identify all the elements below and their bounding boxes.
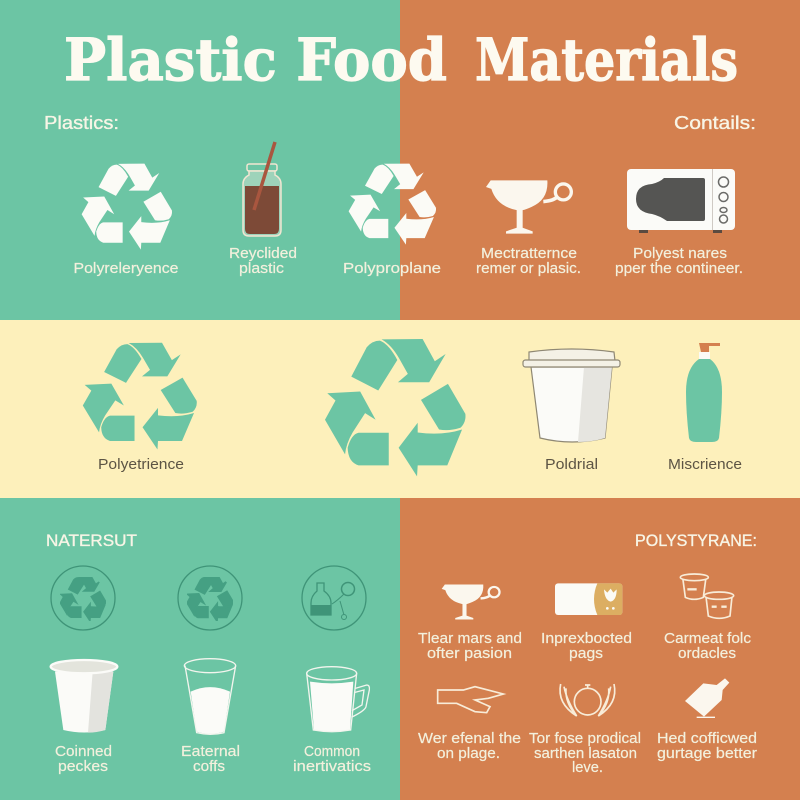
label: tor fose prodical: [529, 730, 641, 776]
item: microwave: [615, 169, 743, 277]
label: inprexbocted pags: pags: [569, 645, 603, 662]
panel: middle cream band: [0, 320, 800, 498]
item: wer efenal: [418, 687, 521, 762]
label: polyest nares: Polyest nares: [633, 245, 727, 262]
icon: green recycle symbol: [83, 343, 197, 449]
item: tor fose prodical: [529, 684, 641, 776]
icon: tilted bottle: [685, 678, 729, 717]
label: carmeat folc: ordacles: [678, 645, 736, 662]
label: reyclided plastic: Reyclided: [229, 245, 297, 262]
label: eaternal coffs: [181, 743, 240, 775]
panel: bottom left green background: [0, 498, 400, 800]
label: wer efenal: Wer efenal the: [418, 730, 521, 747]
icon: lidded cup: [523, 349, 620, 442]
icon: jar with straw: [243, 142, 281, 236]
heading: contails: Contails:: [674, 113, 756, 133]
label: carmeat folc: Carmeat folc: [664, 630, 752, 647]
label: polypropylane: Polyproplane: [343, 260, 441, 277]
label: mectratternce: [476, 245, 581, 277]
label: common inertivatics: [293, 743, 371, 775]
icon: mug of milk: [307, 667, 369, 732]
item: miscrience: [668, 343, 742, 473]
label: eaternal coffs: coffs: [193, 758, 225, 775]
label: polyest nares: pper the contineer.: [615, 260, 743, 277]
icon: white paper cup: [51, 660, 117, 733]
title: [64, 26, 738, 94]
icon: glass of milk: [184, 659, 236, 734]
icon: outlined hand: [438, 687, 503, 713]
item: poldrial: [523, 349, 620, 473]
heading: polystyrane: POLYSTYRANE:: [635, 531, 757, 550]
icon: microwave: [627, 169, 735, 233]
label: tor fose prodical: sarthen lasaton: [534, 745, 637, 762]
panel: top right orange background: [400, 0, 800, 320]
label: tor fose prodical: Tor fose prodical: [529, 730, 641, 747]
item: carmeat folc: [664, 574, 752, 662]
label: coinned peckes: [55, 743, 112, 775]
item: polypropylane: [343, 164, 441, 277]
label: common inertivatics: Common: [304, 743, 360, 760]
heading: natersut: NATERSUT: [46, 531, 137, 550]
icon: center white recycle symbol: [349, 164, 436, 245]
label: carmeat folc: [664, 630, 752, 662]
label: common inertivatics: inertivatics: [293, 758, 371, 775]
icon: two tubs: [680, 574, 734, 618]
title: Plastic Food: [64, 26, 447, 94]
label: tlear mars: [418, 630, 522, 662]
label: inprexbocted pags: Inprexbocted: [541, 630, 632, 647]
label: tlear mars: Tlear mars and: [418, 630, 522, 647]
label: tor fose prodical: leve.: [572, 759, 603, 776]
panel: top left green background: [0, 0, 400, 320]
label: miscrience: Miscrience: [668, 456, 742, 473]
label: hed cofficwed: Hed cofficwed: [657, 730, 757, 747]
item: polyetrience: [83, 343, 197, 473]
icon: large green recycle symbol: [325, 339, 465, 476]
label: reyclided plastic: [229, 245, 297, 277]
label: reyclided plastic: plastic: [239, 260, 285, 277]
item: hed cofficwed: [657, 678, 757, 762]
item: tlear mars: [418, 585, 522, 662]
heading: plastics: Plastics:: [44, 113, 119, 133]
item: polyreleryence: [74, 164, 178, 277]
label: polyest nares: [615, 245, 743, 277]
label: eaternal coffs: Eaternal: [181, 743, 240, 760]
label: hed cofficwed: [657, 730, 757, 762]
icon: small goblet cup: [442, 585, 500, 619]
icon: circled recycle badge: [51, 566, 115, 630]
label: polyetrience: Polyetrience: [98, 456, 184, 473]
label: wer efenal: on plage.: [437, 745, 500, 762]
label: wer efenal: [418, 730, 521, 762]
label: mectratternce: remer or plasic.: [476, 260, 581, 277]
icon: white recycle symbol: [82, 164, 172, 250]
label: mectratternce: Mectratternce: [481, 245, 577, 262]
label: inprexbocted pags: [541, 630, 632, 662]
label: polyreleryence: Polyreleryence: [74, 260, 178, 277]
item: recycled plastic jar: [229, 142, 297, 277]
title: Materials: [475, 26, 738, 94]
panel: bottom right orange background: [400, 498, 800, 800]
item: coinned peckes: [51, 566, 117, 775]
label: tlear mars: ofter pasion: [427, 645, 512, 662]
label: coinned peckes: Coinned: [55, 743, 112, 760]
label: coinned peckes: peckes: [58, 758, 108, 775]
icon: goblet cup: [486, 180, 571, 234]
item: mectratternce: [476, 180, 581, 277]
icon: fruit with laurel: [560, 684, 615, 716]
label: hed cofficwed: gurtage better: [657, 745, 757, 762]
item: common inertivatics: [293, 566, 371, 775]
label: poldrial: Poldrial: [545, 456, 598, 473]
item: eaternal coffs: [178, 566, 242, 775]
icon: circled recycle badge: [178, 566, 242, 630]
icon: card with flower: [555, 583, 622, 615]
icon: circled bottle and flower badge: [302, 566, 366, 630]
icon: pump bottle: [686, 343, 722, 442]
item: inprexbocted pags: [541, 583, 632, 662]
